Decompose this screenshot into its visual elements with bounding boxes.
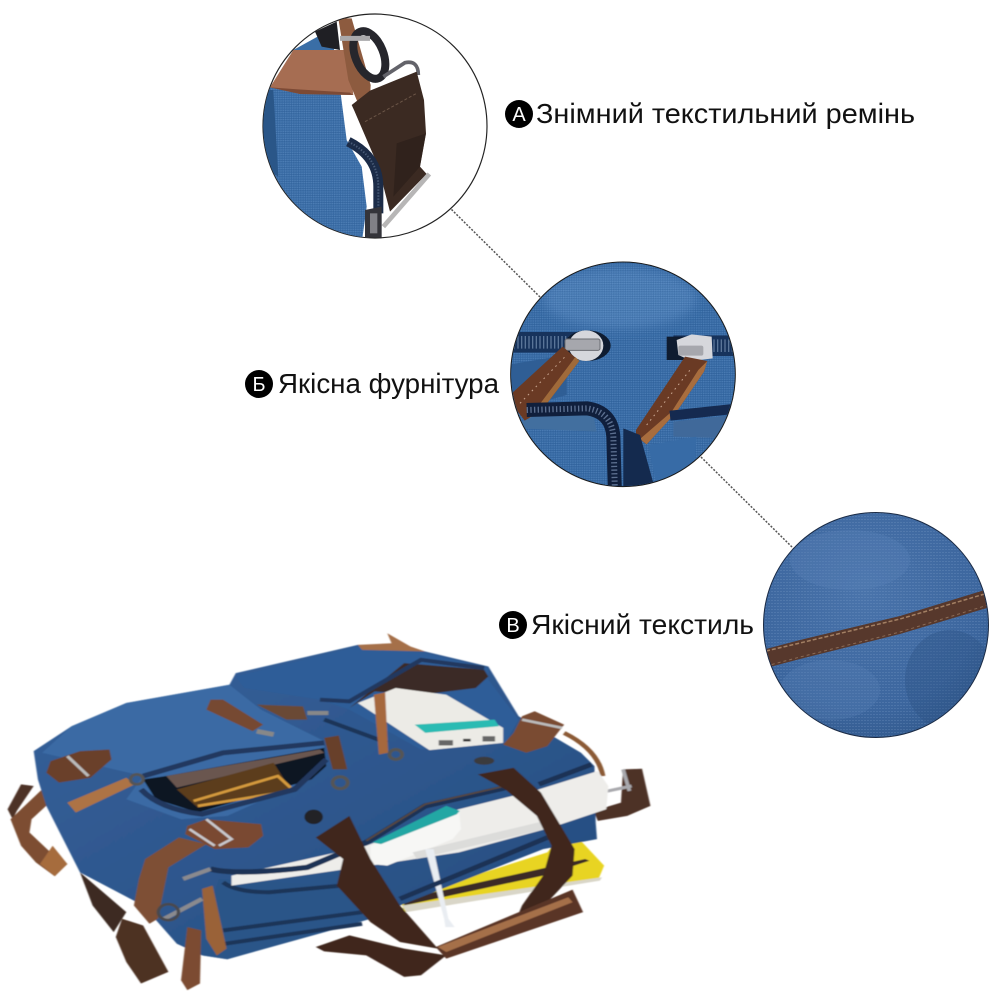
- main bag body: [34, 645, 597, 959]
- bag photo illustration: [8, 633, 650, 990]
- top leather tab: [358, 633, 425, 652]
- label A: removable textile strap: Знімний текстильний ремінь: [536, 98, 915, 129]
- dotted connector line A to B: [449, 207, 541, 298]
- main zipper: [210, 788, 505, 872]
- left shoulder strap stub: [8, 779, 69, 876]
- dotted connector line B to C: [701, 457, 794, 549]
- front left pocket with wallet: [42, 685, 326, 819]
- detail circle A: removable strap: [260, 14, 487, 243]
- front-left clasp tab: [116, 919, 168, 984]
- label B: quality hardware: Б: [252, 374, 266, 396]
- back top pocket with power bank: [236, 647, 519, 750]
- front lower panel: [202, 879, 404, 959]
- label C: quality textile: Якісний текстиль: [531, 609, 754, 640]
- front leather strap and buckle: [134, 819, 263, 924]
- magazines at bottom right: [400, 828, 604, 912]
- left leather strap and buckle: [46, 749, 112, 783]
- label B: quality hardware: Якісна фурнітура: [278, 368, 499, 399]
- back strap shadow: [80, 872, 126, 932]
- rivets: [304, 757, 494, 824]
- carrying handle: [316, 768, 583, 977]
- front zipper pulls: [158, 869, 226, 990]
- lower zippers: [223, 882, 362, 944]
- detail circle C: quality textile: [762, 512, 995, 738]
- detail circle B: quality hardware: [507, 258, 740, 495]
- white cable tag: [425, 849, 455, 927]
- zipper pulls and tabs on top: [67, 692, 402, 813]
- label A: removable textile strap: А: [512, 104, 526, 126]
- right rear clasp: [564, 733, 650, 821]
- label C: quality textile: В: [506, 615, 520, 637]
- laptop and white book in main compartment: [232, 771, 608, 886]
- right leather strap and buckle: [503, 711, 564, 753]
